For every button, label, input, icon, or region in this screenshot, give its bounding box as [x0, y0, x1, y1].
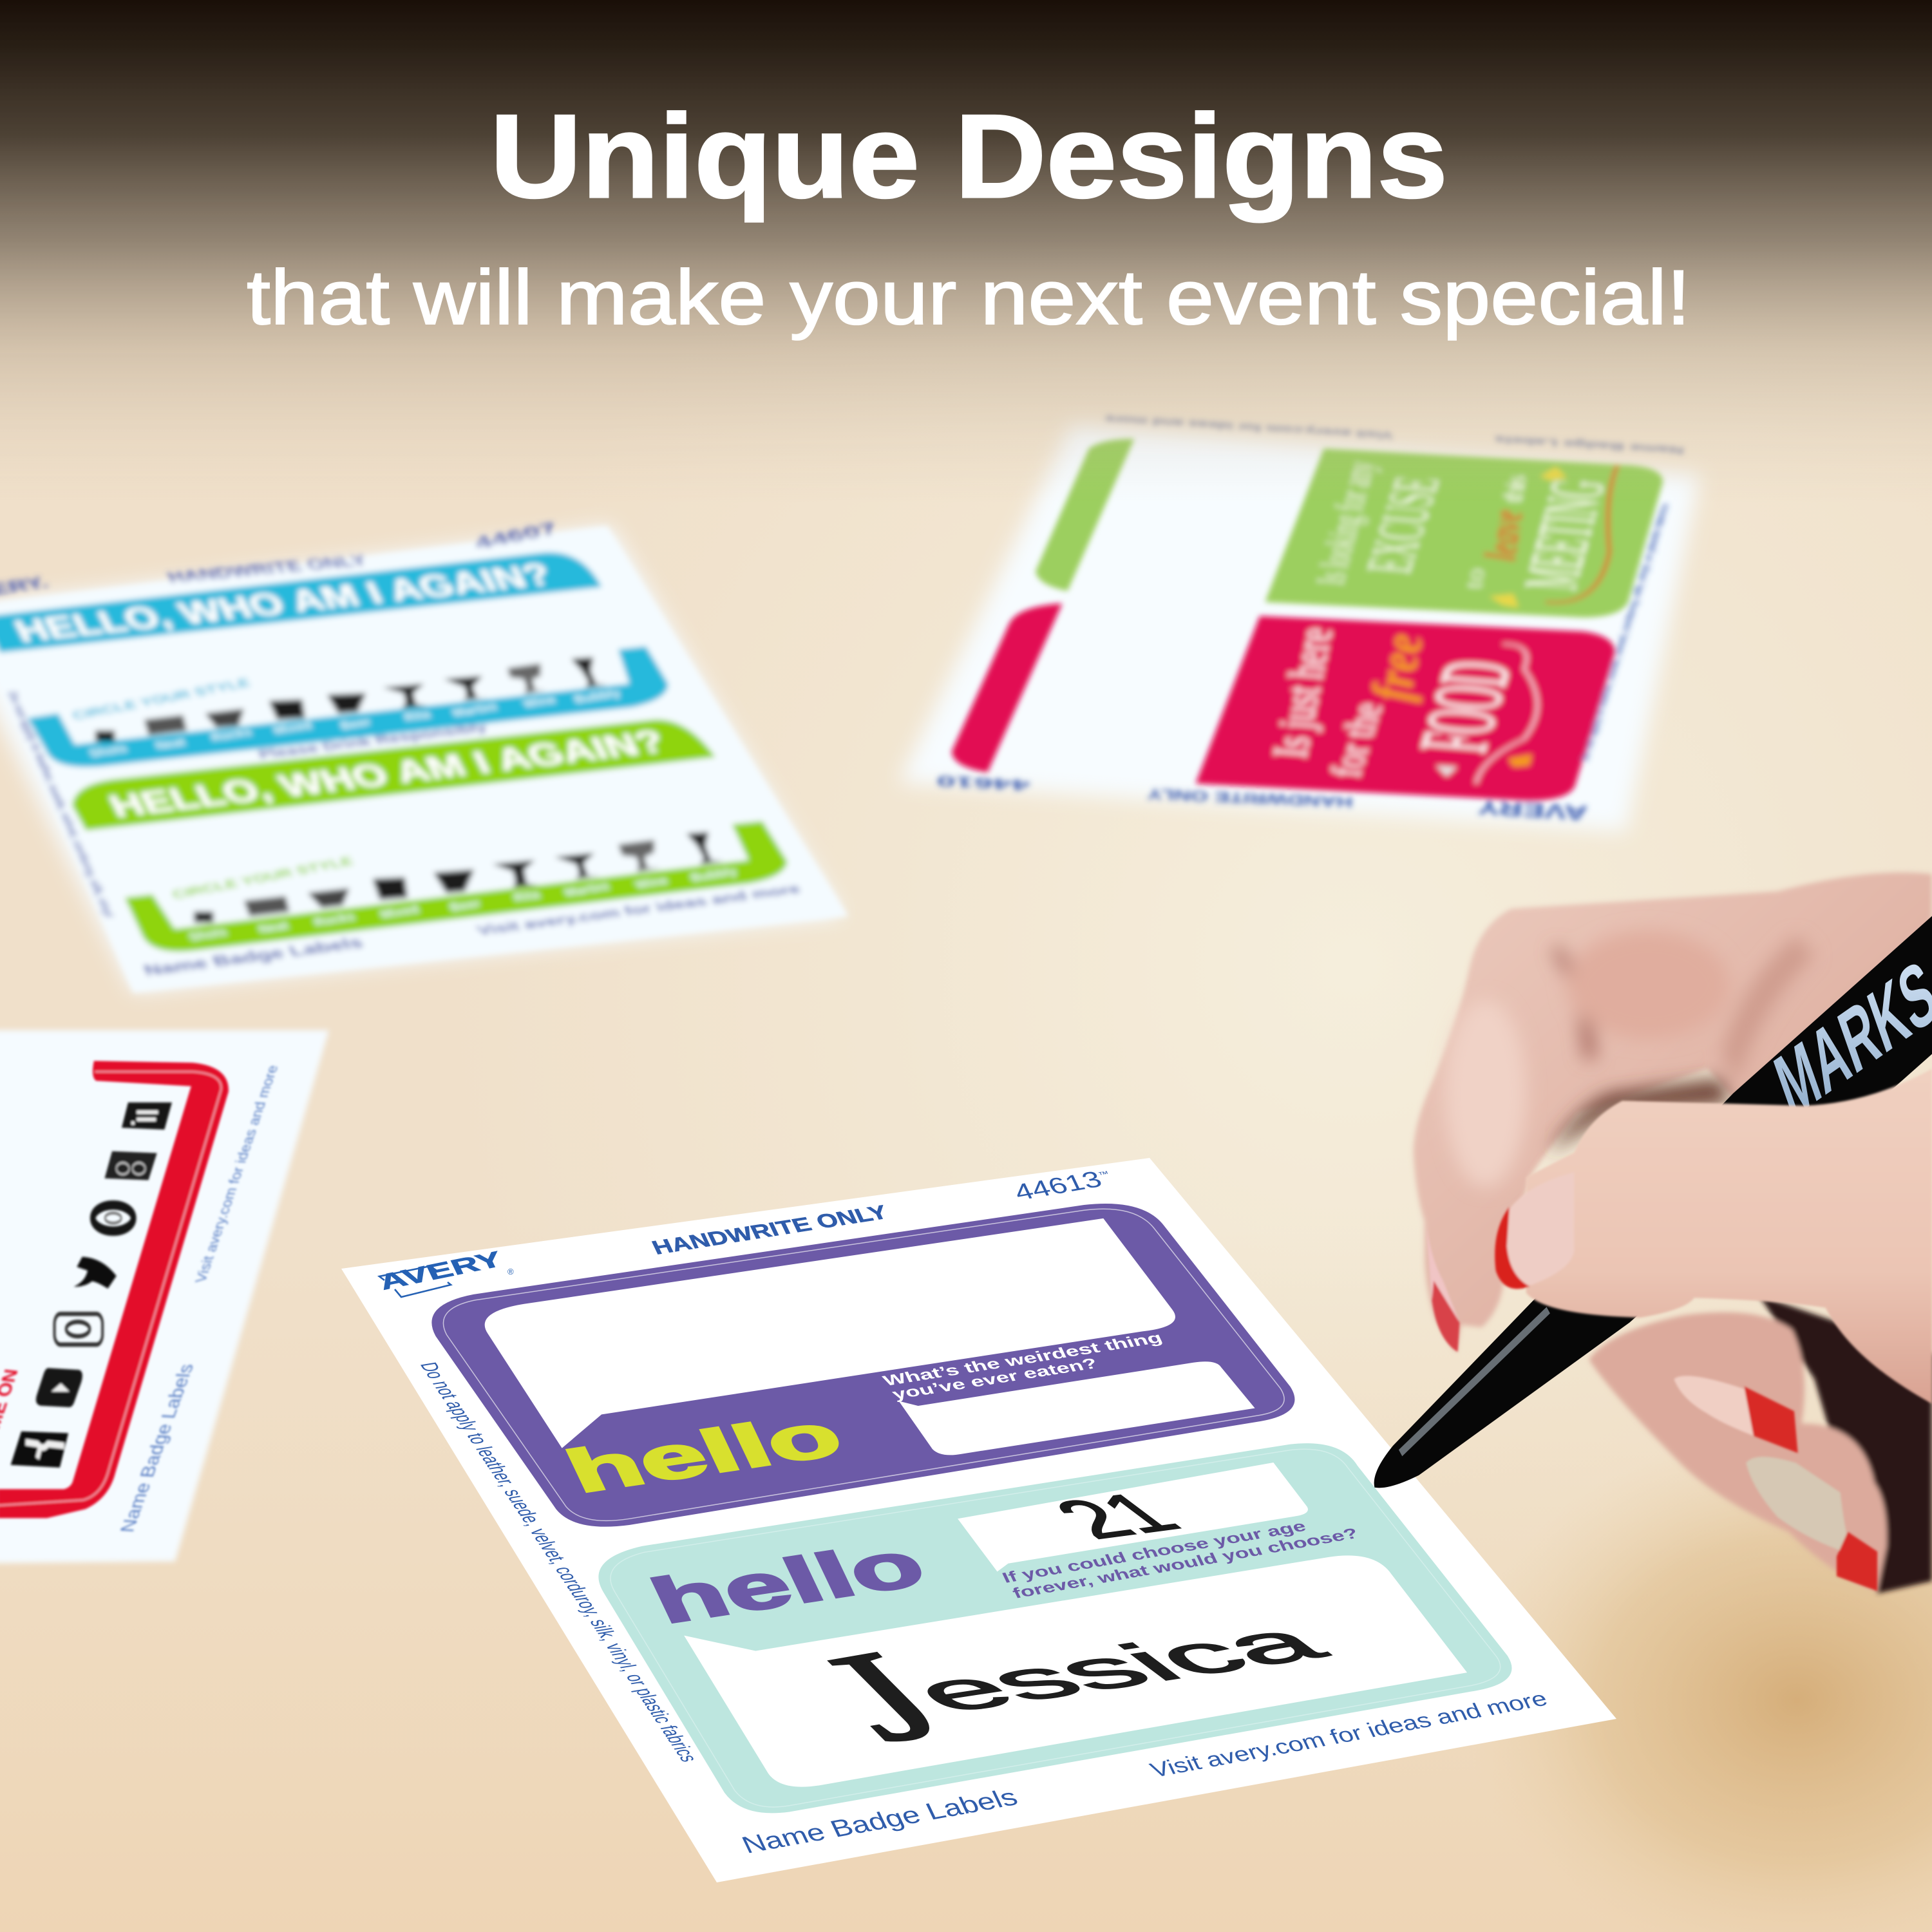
sheet header and footer text: Name Badge Labels [140, 934, 366, 979]
thumb [1526, 1069, 1932, 1404]
avery logo: AVERY [375, 1247, 507, 1295]
circle your style captions: CIRCLE YOUR STYLE [70, 676, 253, 723]
sheet header and footer text: Visit avery.com for ideas and more [475, 882, 803, 938]
upside down sheet printing: AVERY [1477, 795, 1589, 825]
sheet header and footer text [0, 519, 803, 979]
icon: flickr [104, 1151, 157, 1180]
drink style labels: Shots [187, 925, 230, 943]
teal badge question: forever, what would you choose? [1010, 1526, 1361, 1602]
dark shadow behind hand [1759, 1295, 1932, 1593]
finger crease shading [1552, 945, 1596, 1059]
drink style labels: Martini [450, 701, 500, 719]
icon: linkedin [122, 1103, 172, 1130]
drink style labels: Shots [87, 742, 130, 760]
handwritten name: J [753, 1627, 1007, 1766]
banner headings: hello who am I again: HELLO, WHO AM I AGAIN? [8, 556, 558, 649]
circle your style captions [70, 676, 356, 902]
green label quote: is looking for any excuse to leave this meeting: this [1498, 473, 1532, 504]
green label quote: is looking for any excuse to leave this meeting: leave [1475, 508, 1533, 562]
glitter fingernail [1746, 1457, 1852, 1554]
title: Unique Designs [490, 90, 1448, 222]
drink style labels: Wine [633, 875, 670, 891]
upside down sheet printing: Do not apply to leather, suede, velvet, corduroy, silk, vinyl, or plastic fabrics [1578, 503, 1671, 761]
banner headings: hello who am I again [8, 556, 671, 824]
sheet header and footer text: HANDWRITE ONLY [164, 552, 370, 586]
green label quote: is looking for any excuse to leave this meeting [1308, 460, 1621, 592]
teal badge hello: hello [639, 1528, 936, 1636]
sheet header and footer text: Do not apply to leather, suede, velvet, corduroy, silk, vinyl [5, 691, 117, 918]
drink style labels: Beer [338, 715, 374, 732]
upside down sheet printing: HANDWRITE ONLY [1147, 786, 1353, 810]
pink label quote: is just here for the free food [1262, 626, 1532, 779]
handwrite only caption: HANDWRITE ONLY [649, 1201, 892, 1259]
purple badge question [880, 1330, 1165, 1403]
upside down sheet printing: 44610 [936, 772, 1030, 793]
middle fingernail [1426, 1226, 1459, 1352]
name badge sheet: green and pink quote labels: EXCUSE [1352, 475, 1454, 576]
name badge sheet: green and pink quote labels: FOOD [1399, 658, 1532, 756]
icon: instagram [55, 1314, 102, 1345]
pink label quote: is just here for the free food: for the [1321, 701, 1392, 779]
purple badge question: you’ve ever eaten? [889, 1356, 1101, 1403]
purple badge hello: hello [555, 1401, 853, 1505]
sheet product name: Name Badge Labels [737, 1783, 1022, 1859]
drink style labels: Mixed [378, 903, 422, 921]
drink style labels: Mixed [271, 719, 315, 737]
footer text: Visit avery.com for ideas and more [193, 1065, 281, 1283]
avery logo: ® [507, 1267, 514, 1276]
main name badge sheet [341, 1158, 1616, 1882]
drink style labels: Beer [448, 897, 483, 914]
sheet header and footer text: Please Drink Responsibly [256, 721, 490, 761]
red frame [0, 1061, 229, 1518]
ring fingernail [1674, 1376, 1754, 1435]
sheet header and footer text: 44607 [471, 519, 560, 553]
drink style labels: Rocks [209, 726, 254, 744]
drink style labels: Rocks [312, 911, 357, 929]
drink style labels: Rita [402, 708, 433, 724]
avery logo [375, 1247, 514, 1297]
teal badge question: If you could choose your age [999, 1518, 1309, 1586]
name badge sheet: green and pink quote labels [899, 413, 1700, 831]
top dark gradient overlay [0, 0, 1932, 502]
icon: at sign [93, 1205, 133, 1231]
upside down sheet printing: Name Badge Labels [1494, 434, 1684, 455]
name badge sheet: red social media label [0, 1030, 329, 1563]
upside down sheet printing: Visit avery.com for ideas and more [1104, 413, 1393, 440]
icon: video play [36, 1368, 82, 1407]
purple badge [431, 1204, 1294, 1527]
handwritten age: 21 [1034, 1482, 1198, 1550]
drink style labels: Martini [562, 880, 612, 899]
teal badge question [999, 1518, 1361, 1602]
circle your style captions: CIRCLE YOUR STYLE [169, 855, 356, 902]
drink style labels: Neat [256, 919, 291, 936]
sheet product number: ™ [1097, 1170, 1111, 1179]
icon: bird [73, 1257, 117, 1289]
banner headings: hello who am I again: HELLO, WHO AM I AGAIN? [103, 723, 671, 824]
marker pen [1374, 916, 1932, 1488]
drink style labels: Bubbly [688, 865, 739, 884]
drink style labels: Wine [521, 694, 558, 710]
name badge sheet: green and pink quote labels: MEETING [1508, 477, 1621, 592]
sheet product number: 44613 [1010, 1168, 1095, 1206]
hand holding marker [1374, 873, 1932, 1593]
handwritten name [753, 1612, 1345, 1766]
name badge sheet: green and pink quote labels: Is looking for any [1308, 460, 1383, 586]
pink label quote: is just here for the free food: Is just here [1262, 626, 1343, 759]
sheet website note: Visit avery.com for ideas and more [1146, 1687, 1551, 1782]
green label quote: is looking for any excuse to leave this meeting: to [1459, 567, 1490, 590]
upside down sheet printing [936, 413, 1684, 825]
handwritten name: essica [889, 1612, 1345, 1723]
lower fingers [1589, 1312, 1887, 1591]
footer text: Name Badge Labels [115, 1363, 198, 1533]
thumbnail [1504, 1172, 1574, 1285]
drink style labels: Neat [153, 735, 188, 752]
pink label quote: is just here for the free food: free [1359, 632, 1435, 703]
index and middle fingers [1414, 873, 1932, 1352]
icon: facebook [11, 1432, 68, 1468]
subtitle: that will make your next event special! [247, 254, 1690, 341]
drink style labels: Bubbly [572, 687, 623, 706]
name badge sheet: cyan and green drink style [0, 519, 848, 993]
footer text [115, 1065, 281, 1533]
purple badge question: What’s the weirdest thing [880, 1330, 1165, 1389]
drink style labels [87, 687, 739, 943]
drink style labels: Rita [511, 888, 543, 904]
teal badge [598, 1443, 1512, 1813]
